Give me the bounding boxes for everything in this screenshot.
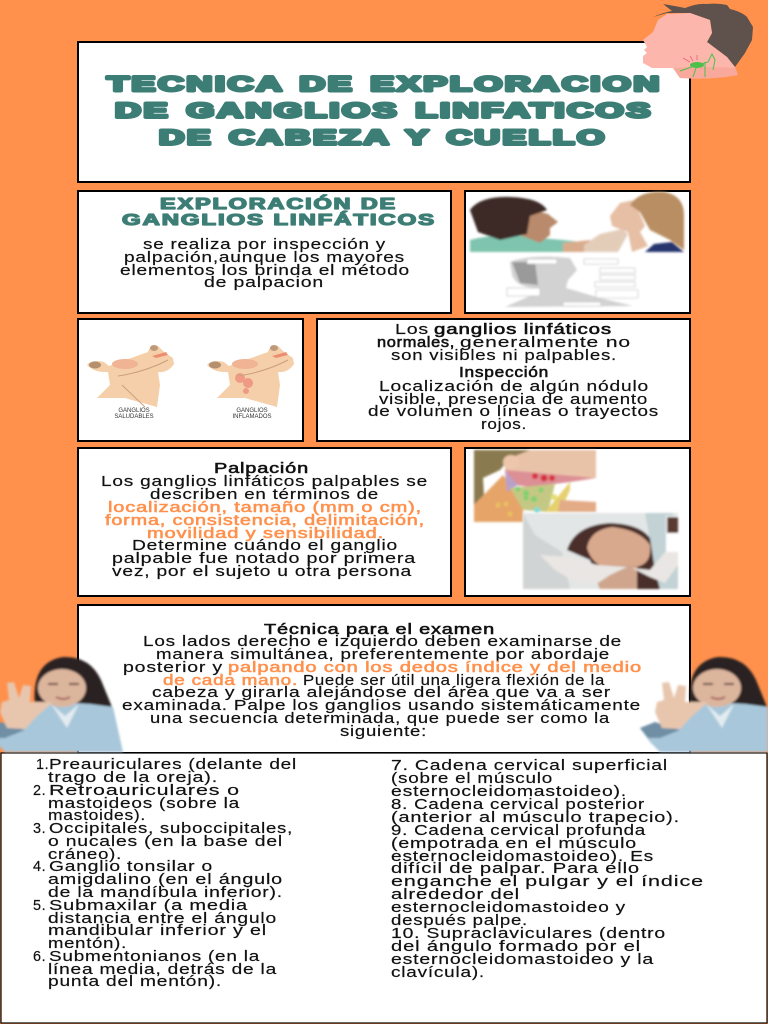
title: DE CABEZA Y CUELLO: [159, 126, 607, 150]
text block: exam technique: posterior y: [123, 660, 223, 676]
panel: list of lymph node groups: [1, 753, 767, 1023]
text block: inspection: [368, 365, 659, 433]
title: [107, 73, 662, 150]
list: items 1 to 6: línea media, detrás de la: [48, 962, 277, 978]
list: items 7 to 10: clavícula).: [391, 965, 485, 981]
text block: elementos los brinda el método: [120, 263, 410, 279]
title: DE GANGLIOS LINFATICOS: [115, 100, 653, 122]
list: items 1 to 6: 6.: [33, 949, 46, 965]
text block: normal nodes: generalmente no: [460, 335, 631, 351]
list: items 1 to 6: [33, 757, 297, 990]
text block: exam technique: examinada. Palpe los ganglios usando sistemáticamente: [122, 698, 641, 714]
list: items 1 to 6: Submentonianos (en la: [49, 949, 260, 965]
list: items 7 to 10: (empotrada en el músculo: [391, 836, 637, 852]
panel: normal nodes and inspection: [317, 319, 690, 441]
text block: normal nodes: Los: [395, 322, 429, 338]
illustration: inflamed neck: GANGLIOS: [236, 408, 268, 414]
list: items 7 to 10: del ángulo formado por el: [391, 939, 641, 955]
panel: palpation: [78, 448, 451, 596]
text block: palpation: Palpación: [214, 461, 309, 477]
text block: exam technique: Puede ser útil una ligera flexión de la: [303, 673, 605, 689]
illustration: healthy neck: [87, 345, 174, 420]
text block: exam technique: Los lados derecho e izquierdo deben examinarse de: [143, 634, 622, 650]
list: items 1 to 6: Retroauriculares o: [49, 783, 240, 799]
panel: neck zones and palpation photo: [465, 448, 690, 596]
text block: inspection: visible, presencia de aumento: [379, 392, 648, 408]
heading: EXPLORACIÓN DE: [160, 195, 397, 213]
text block: palpation: Los ganglios linfáticos palpables se: [101, 474, 428, 490]
text block: palpation: [101, 461, 428, 580]
list: items 1 to 6: trago de la oreja).: [48, 770, 218, 786]
icon: head with swollen lymph node: [643, 4, 753, 79]
photo: palpating neck: [523, 513, 678, 589]
text block: inspection: Localización de algún nódulo: [379, 379, 649, 395]
list: items 1 to 6: punta del mentón).: [48, 974, 222, 990]
title: TECNICA DE EXPLORACION: [107, 73, 662, 96]
list: items 1 to 6: de la mandíbula inferior).: [48, 885, 283, 901]
photo: woman waving, right: [640, 657, 768, 752]
text block: palpation: movilidad y sensibilidad.: [147, 526, 384, 542]
list: items 1 to 6: Ganglio tonsilar o: [49, 859, 213, 875]
text block: inspection: rojos.: [481, 417, 527, 433]
list: items 1 to 6: distancia entre el ángulo: [48, 911, 277, 927]
illustration: healthy neck: GANGLIOS: [118, 408, 150, 414]
text block: palpation: vez, por el sujeto u otra persona: [112, 564, 412, 580]
text block: palpation: localización, tamaño (mm o cm),: [108, 500, 422, 516]
list: items 1 to 6: mastoides).: [48, 808, 146, 824]
text block: normal nodes: normales,: [377, 335, 455, 351]
list: items 7 to 10: esternocleidomastoideo). Es: [391, 849, 654, 865]
panel: title: [78, 42, 690, 182]
heading: GANGLIOS LINFÁTICOS: [122, 212, 436, 229]
list: items 7 to 10: [391, 758, 704, 981]
list: items 1 to 6: Occipitales, suboccipitales,: [49, 821, 293, 837]
panel: exploracion de ganglios: [78, 191, 451, 313]
text block: exam technique: manera simultánea, preferentemente por abordaje: [156, 647, 610, 663]
text block: se realiza por inspección y: [143, 237, 386, 253]
text block: exam technique: cabeza y girarla alejándose del área que va a ser: [152, 685, 611, 701]
list: items 1 to 6: o nucales (en la base del: [48, 834, 283, 850]
list: items 7 to 10: alrededor del: [391, 887, 520, 903]
heading: [122, 195, 436, 229]
text block: exam technique: palpando con los dedos índice y del medio: [228, 660, 642, 676]
list: items 1 to 6: amigdalino (en el ángulo: [48, 872, 283, 888]
photo: woman waving, left: [0, 657, 123, 752]
list: items 7 to 10: (anterior al músculo trapecio).: [391, 810, 680, 826]
text block: palpation: palpable fue notado por primera: [112, 551, 416, 567]
list: items 1 to 6: 4.: [33, 859, 46, 875]
list: items 1 to 6: 2.: [33, 783, 46, 799]
illustration: neck lymph zones: [474, 450, 596, 522]
panel: photos of examination: [465, 191, 690, 313]
list: items 7 to 10: (sobre el músculo: [391, 771, 553, 787]
list: items 7 to 10: esternocleidomastoideo).: [391, 784, 627, 800]
list: items 7 to 10: después palpe.: [391, 913, 528, 929]
list: items 7 to 10: 8. Cadena cervical posterior: [391, 797, 645, 813]
text block: normal nodes: ganglios linfáticos: [434, 322, 612, 338]
text block: palpation: forma, consistencia, delimitación,: [105, 513, 425, 529]
text block: exam technique: [122, 622, 642, 740]
illustration: inflamed neck: INFLAMADOS: [232, 414, 272, 420]
illustration: healthy neck: SALUDABLES: [114, 414, 154, 420]
text block: palpation: Determine cuándo el ganglio: [132, 538, 398, 554]
panel: exam technique: [78, 605, 690, 753]
list: items 7 to 10: 9. Cadena cervical profunda: [391, 823, 646, 839]
illustration: inflamed neck: [207, 345, 294, 420]
list: items 7 to 10: 10. Supraclaviculares (dentro: [391, 926, 666, 942]
list: items 1 to 6: 1.: [36, 757, 49, 773]
list: items 1 to 6: cráneo).: [48, 847, 122, 863]
text block: palpación,aunque los mayores: [124, 250, 405, 266]
list: items 1 to 6: mentón).: [48, 936, 127, 952]
text block: exam technique: una secuencia determinada, que puede ser como la: [150, 711, 610, 727]
text block: exam technique: de cada mano.: [163, 673, 298, 689]
list: items 1 to 6: mandibular inferior y el: [48, 923, 267, 939]
text block: exam technique: Técnica para el examen: [264, 622, 495, 638]
text block: exam technique: siguiente:: [340, 724, 427, 740]
list: items 7 to 10: enganche el pulgar y el índice: [391, 874, 704, 890]
text block: inspection: Inspección: [459, 365, 549, 381]
text block: normal nodes: son visibles ni palpables.: [391, 348, 617, 364]
list: items 7 to 10: 7. Cadena cervical superficial: [391, 758, 668, 774]
text block: de palpacion: [204, 275, 324, 291]
list: items 1 to 6: 3.: [33, 821, 46, 837]
list: items 1 to 6: 5.: [33, 898, 46, 914]
text block: inspection: de volumen o líneas o trayectos: [368, 404, 659, 420]
list: items 1 to 6: mastoideos (sobre la: [48, 796, 240, 812]
photo: doctor palpating neck: [470, 192, 684, 252]
list: items 7 to 10: esternocleidomastoideo y la: [391, 952, 654, 968]
text block: normal nodes: [377, 322, 631, 364]
list: items 7 to 10: difícil de palpar. Para ello: [391, 861, 640, 877]
diagram: neck lymph node chains: [505, 257, 638, 307]
list: items 1 to 6: Preauriculares (delante del: [49, 757, 297, 773]
panel: healthy vs inflamed nodes: [78, 319, 303, 441]
text block: [120, 237, 410, 291]
list: items 7 to 10: esternocleidomastoideo y: [391, 900, 626, 916]
text block: palpation: describen en términos de: [150, 487, 379, 503]
list: items 1 to 6: Submaxilar (a media: [49, 898, 248, 914]
